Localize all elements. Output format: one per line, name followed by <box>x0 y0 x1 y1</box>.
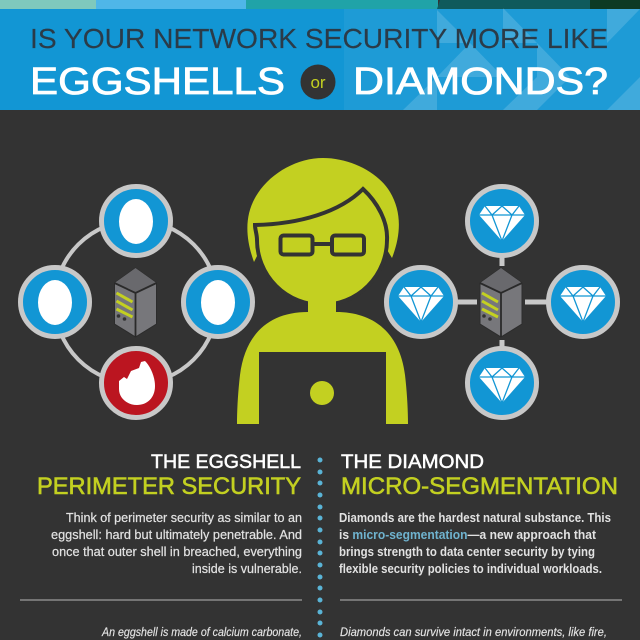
divider <box>340 599 622 601</box>
panel: eggshell text <box>20 452 302 639</box>
italic fact: Diamonds can survive intact in environments, like fire, <box>340 627 607 639</box>
icon: server <box>480 268 522 337</box>
body text: Diamonds are the hardest natural substance. This <box>339 511 611 525</box>
diamond network diagram <box>386 186 618 418</box>
diamond node right <box>548 268 618 336</box>
title line one: IS YOUR NETWORK SECURITY MORE LIKE <box>30 23 608 54</box>
hair <box>247 158 399 262</box>
heading: micro-segmentation: MICRO-SEGMENTATION <box>341 473 618 500</box>
broken egg node bottom <box>102 348 170 418</box>
italic fact: An eggshell is made of calcium carbonate, <box>101 627 302 639</box>
heading: perimeter security: PERIMETER SECURITY <box>37 473 301 500</box>
divider <box>20 599 302 601</box>
body text: inside is vulnerable. <box>192 562 302 576</box>
heading: the diamond: THE DIAMOND <box>341 452 484 473</box>
body text <box>339 511 611 576</box>
diamond node left <box>386 268 456 336</box>
title word: eggshells: EGGSHELLS <box>30 61 285 103</box>
eggshell network diagram <box>20 186 252 418</box>
head <box>255 189 387 305</box>
body text: flexible security policies to individual workloads. <box>339 562 602 576</box>
body text: Think of perimeter security as similar to an <box>66 511 302 525</box>
dotted centre divider <box>318 458 322 638</box>
or badge: or <box>310 73 326 92</box>
diamond node top <box>468 186 536 256</box>
heading: the eggshell: THE EGGSHELL <box>151 452 301 473</box>
egg node left <box>20 268 90 336</box>
panel: diamond text <box>339 452 622 639</box>
body text: once that outer shell in breached, everything <box>52 545 302 559</box>
header banner <box>0 0 640 110</box>
body text: brings strength to data center security by tying <box>339 545 595 559</box>
body text <box>51 511 302 576</box>
title word: diamonds: DIAMONDS? <box>353 61 608 103</box>
egg node top <box>102 186 170 256</box>
or badge <box>300 64 336 100</box>
glasses <box>280 236 364 254</box>
diamond node bottom <box>468 348 536 418</box>
laptop <box>259 352 386 424</box>
neck and body <box>237 298 408 424</box>
body text: is micro-segmentation—a new approach that <box>339 528 597 542</box>
central person with laptop <box>237 158 408 424</box>
body text: eggshell: hard but ultimately penetrable. And <box>51 528 302 542</box>
egg node right <box>184 268 252 336</box>
laptop logo <box>310 381 334 405</box>
icon: server <box>114 268 156 337</box>
